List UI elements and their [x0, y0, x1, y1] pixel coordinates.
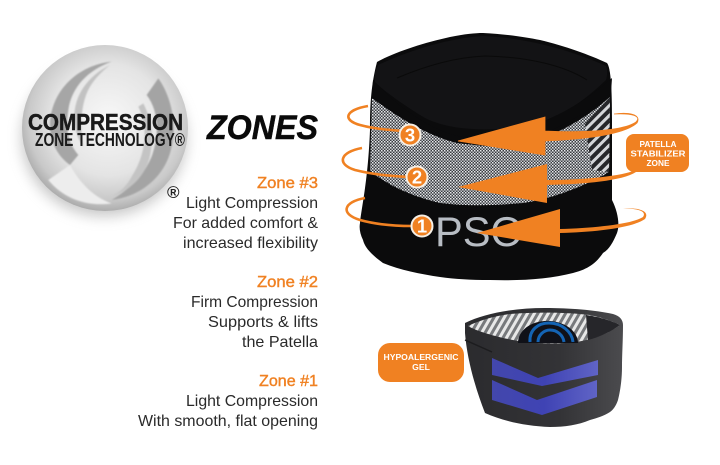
logo: compression zone technology badge: [22, 45, 188, 216]
callout: hypoalergenic gel: GEL: [412, 362, 430, 372]
text block: zone 2: [191, 274, 318, 351]
callout: patella stabilizer zone: ZONE: [646, 158, 670, 168]
sleeve body: [360, 33, 618, 280]
swoosh: zone 1 left: [347, 198, 412, 226]
swoosh: zone 3 left: [348, 106, 403, 131]
sleeve fold line: [465, 340, 492, 352]
zone 2 heading: Zone #2: [257, 274, 318, 291]
gel sleeve body: [465, 308, 623, 427]
heading: zones: ZONES: [206, 109, 318, 147]
text block: zone 1: With smooth, flat opening: [138, 413, 318, 430]
arrow: zone 1: [477, 208, 646, 247]
zone 3 heading: Zone #3: [257, 175, 318, 192]
diagonal stripe panel right: [585, 97, 610, 172]
callout: patella stabilizer zone: STABILIZER: [630, 148, 686, 158]
text block: zone 1: [138, 373, 318, 430]
text block: zone 3: [173, 175, 318, 252]
text block: zone 2: Supports & lifts: [208, 314, 318, 331]
callout: hypoalergenic gel: HYPOALERGENIC: [384, 352, 458, 362]
callout: patella stabilizer zone: PATELLA: [639, 139, 677, 149]
number badge 2: [406, 166, 428, 188]
number badge 1: [412, 216, 432, 236]
PSO knit logo: PSO: [435, 208, 523, 255]
silver disc: [22, 45, 188, 211]
black upper band: [372, 78, 612, 146]
text block: zone 3: increased flexibility: [183, 235, 318, 252]
text block: zone 1: Light Compression: [186, 393, 318, 410]
swoosh: zone 2 left: [343, 148, 408, 177]
number badge 2: 2: [412, 166, 422, 188]
swoosh emblem: [48, 62, 174, 204]
text block: zone 2: Firm Compression: [191, 294, 318, 311]
number badge 3: [400, 124, 420, 146]
logo wordmark line 2: ZONE TECHNOLOGY®: [35, 130, 185, 150]
compression knit band: [370, 97, 610, 205]
gel chevrons: [492, 358, 598, 415]
text block: zone 3: Light Compression: [186, 195, 318, 212]
blue coil inside: [518, 321, 578, 343]
inner opening: [375, 36, 607, 129]
gel insert product illustration: [465, 308, 623, 427]
knee sleeve product illustration: [343, 33, 646, 280]
lining shadow right: [586, 315, 620, 340]
number badge 3: 3: [405, 124, 415, 146]
logo shadow: [22, 60, 186, 216]
inner lining: [468, 313, 620, 343]
text block: zone 2: the Patella: [242, 334, 318, 351]
logo wordmark line 1: COMPRESSION: [28, 109, 183, 135]
number badge 1: 1: [417, 216, 427, 236]
callout: hypoalergenic gel: [378, 343, 464, 382]
arrow: zone 2: [458, 164, 636, 203]
arrow: zone 3: [458, 113, 638, 155]
callout: patella stabilizer zone: [626, 134, 689, 172]
zone 1 heading: Zone #1: [259, 373, 318, 390]
text block: zone 3: For added comfort &: [173, 215, 318, 232]
registered mark: ®: [167, 183, 180, 202]
